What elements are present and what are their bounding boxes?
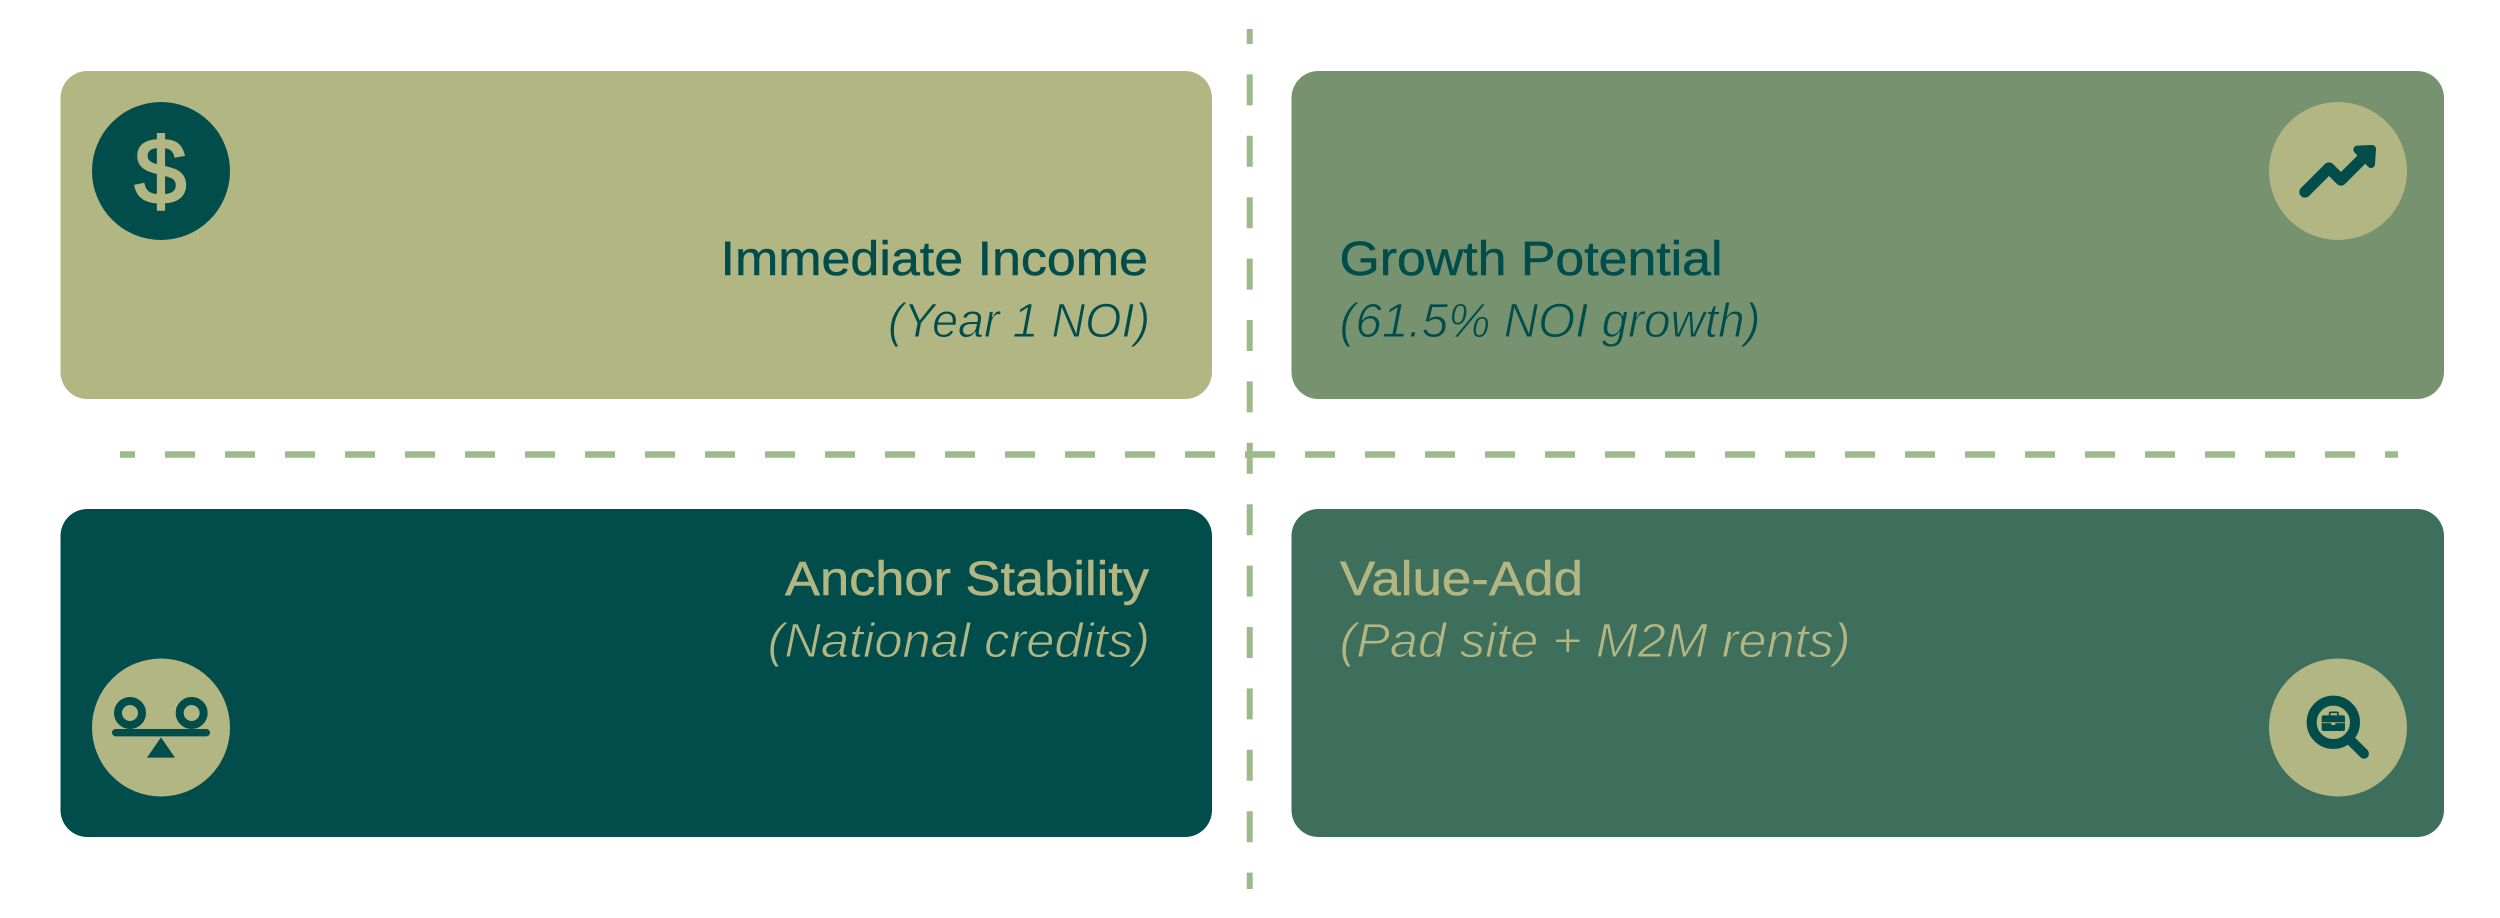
heading: anchor stability: Anchor Stability [785, 553, 1149, 606]
heading: immediate income: Immediate Income [720, 233, 1148, 286]
icon: dollar sign [92, 102, 230, 240]
panel: anchor stability [60, 509, 1212, 837]
heading: growth potential: Growth Potential [1340, 233, 1722, 286]
icon: magnifier with briefcase [2269, 658, 2407, 796]
panel: value-add [1292, 509, 2444, 837]
icon: trend arrow [2269, 102, 2407, 240]
subheading: NOI growth: (61.5% NOI growth) [1340, 295, 1760, 348]
icon: balance scale [92, 658, 230, 796]
panel: immediate income [60, 71, 1212, 399]
subheading: national credits: (National credits) [768, 615, 1150, 668]
subheading: year 1 NOI: (Year 1 NOI) [888, 295, 1150, 348]
heading: value-add: Value-Add [1340, 553, 1583, 606]
subheading: pad site and M2M rents: (Pad site + M2M rents) [1340, 615, 1850, 668]
panel: growth potential [1292, 71, 2444, 399]
icon: dollar sign: $ [135, 119, 186, 223]
